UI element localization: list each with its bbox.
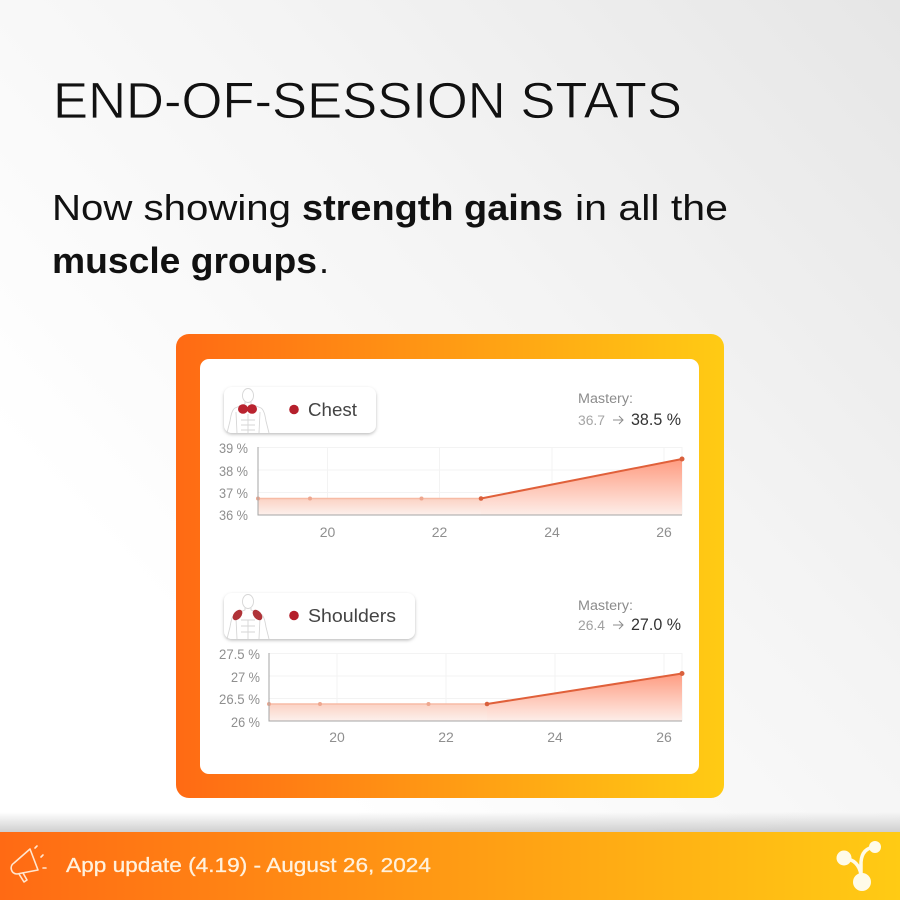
shoulders section	[219, 593, 684, 745]
shoulders mastery	[578, 598, 681, 634]
subtitle text: strength gains	[302, 187, 563, 228]
chest chart: 37 %	[219, 485, 248, 501]
shoulders chart: 27.5 %	[219, 646, 260, 662]
shoulders mastery: 27.0 %	[631, 616, 681, 634]
legend dot	[289, 405, 299, 414]
chest chart: 26	[656, 524, 672, 540]
chest label chip	[224, 387, 376, 433]
icon: megaphone	[11, 846, 46, 882]
footer text: App update (4.19) - August 26, 2024	[66, 854, 431, 877]
shoulders label chip	[224, 593, 415, 639]
label: Shoulders	[308, 605, 396, 626]
shoulders chart: 26 %	[231, 714, 260, 730]
label: Chest	[308, 399, 357, 420]
shoulders chart: 26.5 %	[219, 691, 260, 707]
chest mastery: 36.7	[578, 412, 605, 428]
footer bar	[0, 832, 900, 900]
chest chart: 20	[320, 524, 335, 540]
subtitle text: in all the	[575, 187, 728, 228]
chest chart: 22	[432, 524, 447, 540]
shoulders chart: 24	[547, 729, 563, 745]
chest mastery: Mastery:	[578, 391, 633, 406]
panel: gradient frame with stats card	[176, 334, 724, 798]
chest chart: 36 %	[219, 507, 248, 523]
subtitle text	[52, 187, 728, 281]
chest chart	[219, 440, 684, 540]
title: END-OF-SESSION STATS	[53, 72, 682, 129]
icon: chest body	[227, 388, 269, 433]
shoulders chart: 27 %	[231, 669, 260, 685]
chest chart: 24	[544, 524, 560, 540]
shoulders mastery: 26.4	[578, 617, 605, 633]
chest section	[219, 387, 684, 540]
legend dot	[289, 611, 299, 620]
chest mastery: 38.5 %	[631, 411, 681, 429]
icon: shoulders body	[227, 594, 269, 639]
icon: app logo	[836, 841, 881, 891]
subtitle text: .	[319, 240, 329, 281]
shoulders mastery: Mastery:	[578, 598, 633, 613]
shoulders chart: 26	[656, 729, 672, 745]
subtitle text: muscle groups	[52, 240, 317, 281]
subtitle text: Now showing	[52, 187, 291, 228]
shoulders chart	[219, 646, 684, 745]
chest chart: 39 %	[219, 440, 248, 456]
chest chart: 38 %	[219, 463, 248, 479]
chest mastery	[578, 391, 681, 429]
shoulders chart: 22	[438, 729, 454, 745]
shoulders chart: 20	[329, 729, 345, 745]
